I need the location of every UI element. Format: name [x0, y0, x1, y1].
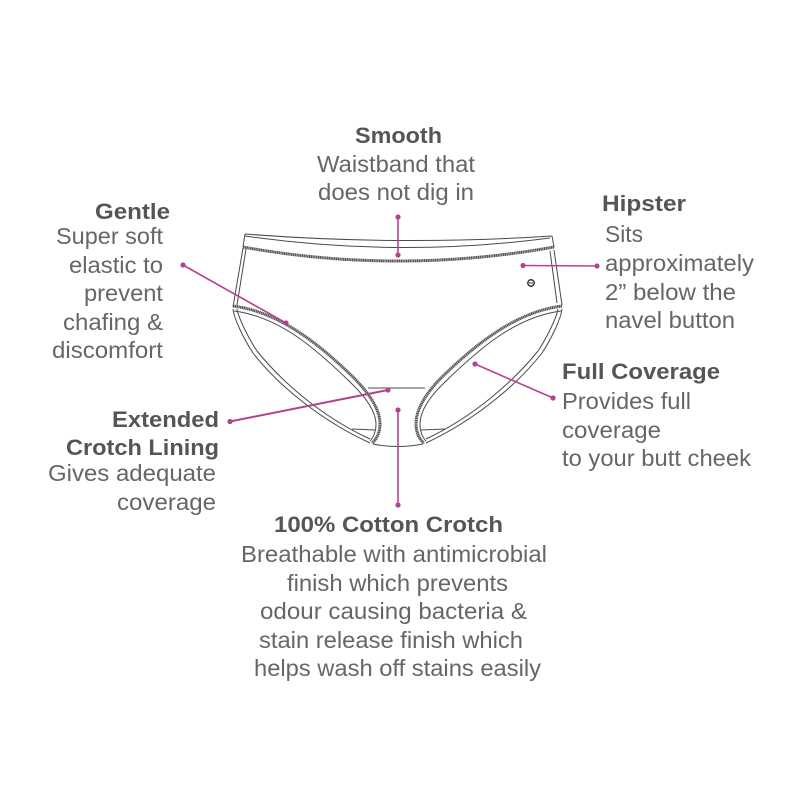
- text: hipster: approximately: [605, 250, 754, 276]
- callout line: extended crotch lining: [227, 387, 391, 424]
- left leg opening: [233, 306, 380, 443]
- callout line: hipster: [520, 263, 600, 269]
- text: 100% cotton crotch: odour causing bacteria &: [260, 598, 527, 624]
- garment line drawing: [233, 234, 562, 446]
- text: gentle: [52, 199, 170, 363]
- callout line: smooth: [395, 214, 401, 258]
- text: full coverage: Provides full: [562, 388, 691, 414]
- text: gentle: chafing &: [63, 309, 163, 335]
- callout line: gentle: [180, 262, 289, 326]
- waistband: [243, 234, 554, 261]
- text: 100% cotton crotch: [241, 512, 547, 681]
- text: smooth: [317, 123, 475, 205]
- text: hipster: 2” below the: [605, 279, 736, 305]
- text: extended crotch lining: coverage: [117, 489, 216, 515]
- logo mark: [528, 280, 534, 286]
- crotch lining lines: [352, 388, 445, 446]
- text: 100% cotton crotch: 100% Cotton Crotch: [274, 512, 503, 537]
- text: gentle: Super soft: [56, 223, 163, 249]
- text: gentle: prevent: [84, 280, 163, 306]
- text: hipster: navel button: [605, 307, 735, 333]
- text: full coverage: to your butt cheek: [562, 445, 751, 471]
- text: extended crotch lining: Extended: [112, 407, 219, 432]
- text: smooth: Waistband that: [317, 151, 475, 177]
- text: gentle: elastic to: [69, 252, 163, 278]
- text: 100% cotton crotch: stain release finish which: [259, 627, 523, 653]
- text: gentle: Gentle: [95, 199, 170, 224]
- text: smooth: Smooth: [355, 123, 442, 148]
- text: 100% cotton crotch: finish which prevents: [287, 570, 508, 596]
- right leg opening: [416, 306, 562, 443]
- text: extended crotch lining: Crotch Lining: [66, 435, 219, 460]
- callout line: full coverage: [472, 361, 556, 401]
- text: full coverage: Full Coverage: [562, 359, 720, 384]
- body side seams: [233, 248, 562, 307]
- callout line: cotton crotch: [395, 407, 401, 508]
- text: extended crotch lining: Gives adequate: [48, 460, 216, 486]
- text: hipster: Hipster: [602, 191, 686, 216]
- text: gentle: discomfort: [52, 337, 163, 363]
- text: 100% cotton crotch: helps wash off stains easily: [254, 655, 541, 681]
- text: 100% cotton crotch: Breathable with antimicrobial: [241, 541, 547, 567]
- text: full coverage: coverage: [562, 417, 661, 443]
- text: hipster: Sits: [605, 221, 643, 247]
- text: smooth: does not dig in: [318, 179, 474, 205]
- text: full coverage: [562, 359, 751, 471]
- text: extended crotch lining: [48, 407, 219, 515]
- text: hipster: [602, 191, 754, 333]
